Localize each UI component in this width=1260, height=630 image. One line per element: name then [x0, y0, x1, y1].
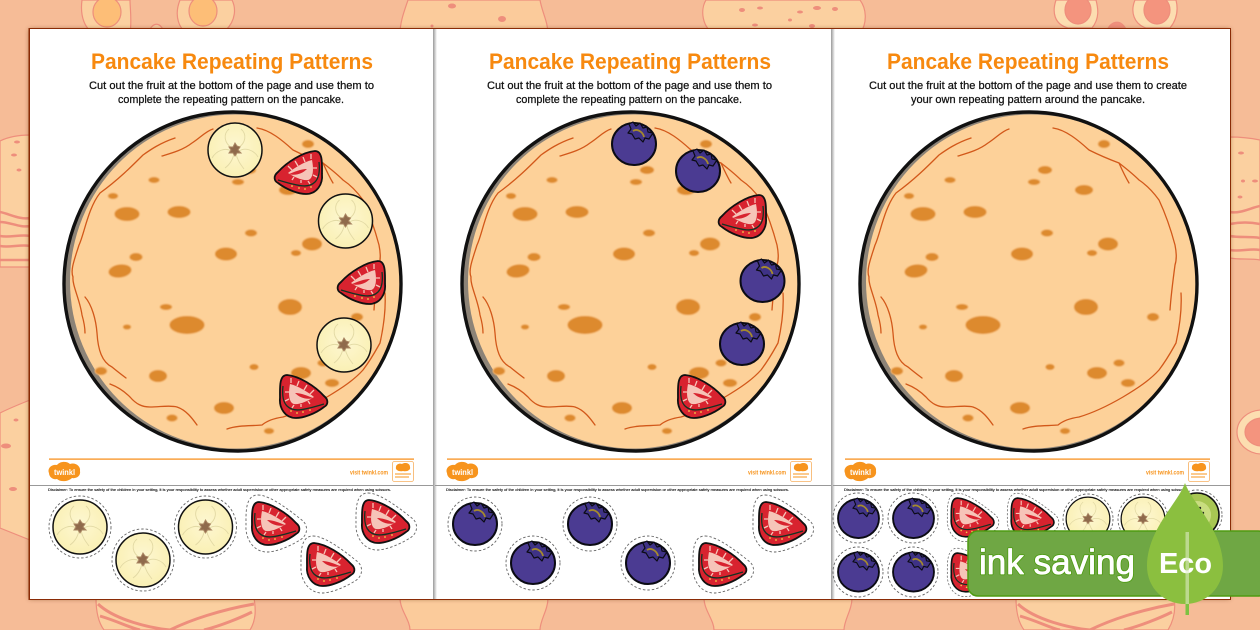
title: Pancake Repeating Patterns	[887, 49, 1169, 74]
ink saving eco badge	[968, 483, 1260, 615]
background pancakes sides	[0, 135, 1260, 540]
footer line	[447, 458, 812, 460]
leaf stem	[1186, 532, 1189, 615]
background pancake speckles	[414, 4, 838, 624]
eco label: Eco	[1159, 548, 1212, 580]
divider	[435, 485, 831, 486]
badge bar	[968, 531, 1260, 596]
instructions	[487, 80, 772, 106]
instructions: Cut out the fruit at the bottom of the page and use them to	[487, 80, 772, 92]
instructions	[89, 80, 374, 106]
instructions: complete the repeating pattern on the pancake.	[516, 94, 742, 106]
divider	[833, 485, 1230, 486]
footer logos	[49, 462, 413, 482]
panel: worksheet 1 banana and strawberry	[30, 29, 433, 599]
footer line	[845, 458, 1210, 460]
background pancakes top	[82, 0, 1177, 34]
instructions: complete the repeating pattern on the pancake.	[118, 94, 344, 106]
pancake	[462, 112, 799, 451]
ink saving label: ink saving	[979, 543, 1135, 582]
fruit pattern on pancake	[612, 122, 784, 418]
footer logos	[447, 462, 812, 482]
disclaimer: Disclaimer: To ensure the safety of the children in your setting, it is your responsibility to assess whether adult supervision or other appropriate safety measures are required when using scissors.	[48, 488, 391, 492]
page gutter	[831, 29, 835, 599]
disclaimer: Disclaimer: To ensure the safety of the children in your setting, it is your responsibility to assess whether adult supervision or other appropriate safety measures are required when using scissors.	[446, 488, 789, 492]
cut-out fruit	[448, 495, 814, 593]
title: Pancake Repeating Patterns	[489, 49, 771, 74]
divider	[30, 485, 433, 486]
instructions: your own repeating pattern around the pancake.	[911, 94, 1145, 106]
fruit pattern on pancake	[208, 123, 385, 418]
panel: worksheet 2 blueberry and strawberry	[435, 29, 831, 599]
ink saving label: ink saving	[979, 543, 1135, 582]
disclaimer: Disclaimer: To ensure the safety of the children in your setting, it is your responsibility to assess whether adult supervision or other appropriate safety measures are required when using scissors.	[844, 488, 1187, 492]
instructions: Cut out the fruit at the bottom of the page and use them to create	[869, 80, 1187, 92]
page gutter	[433, 29, 437, 599]
pancake	[64, 112, 401, 451]
cut-out fruit	[49, 493, 417, 593]
instructions: Cut out the fruit at the bottom of the page and use them to	[89, 80, 374, 92]
pancake	[860, 112, 1197, 451]
cut-out fruit	[833, 490, 1222, 597]
panel: worksheet 3 create your own	[833, 29, 1230, 599]
footer logos	[845, 462, 1210, 482]
background pancakes bottom	[96, 598, 1175, 630]
icon: eco leaf drop	[1147, 483, 1223, 604]
footer line	[49, 458, 414, 460]
title: Pancake Repeating Patterns	[91, 49, 373, 74]
instructions	[869, 80, 1187, 106]
